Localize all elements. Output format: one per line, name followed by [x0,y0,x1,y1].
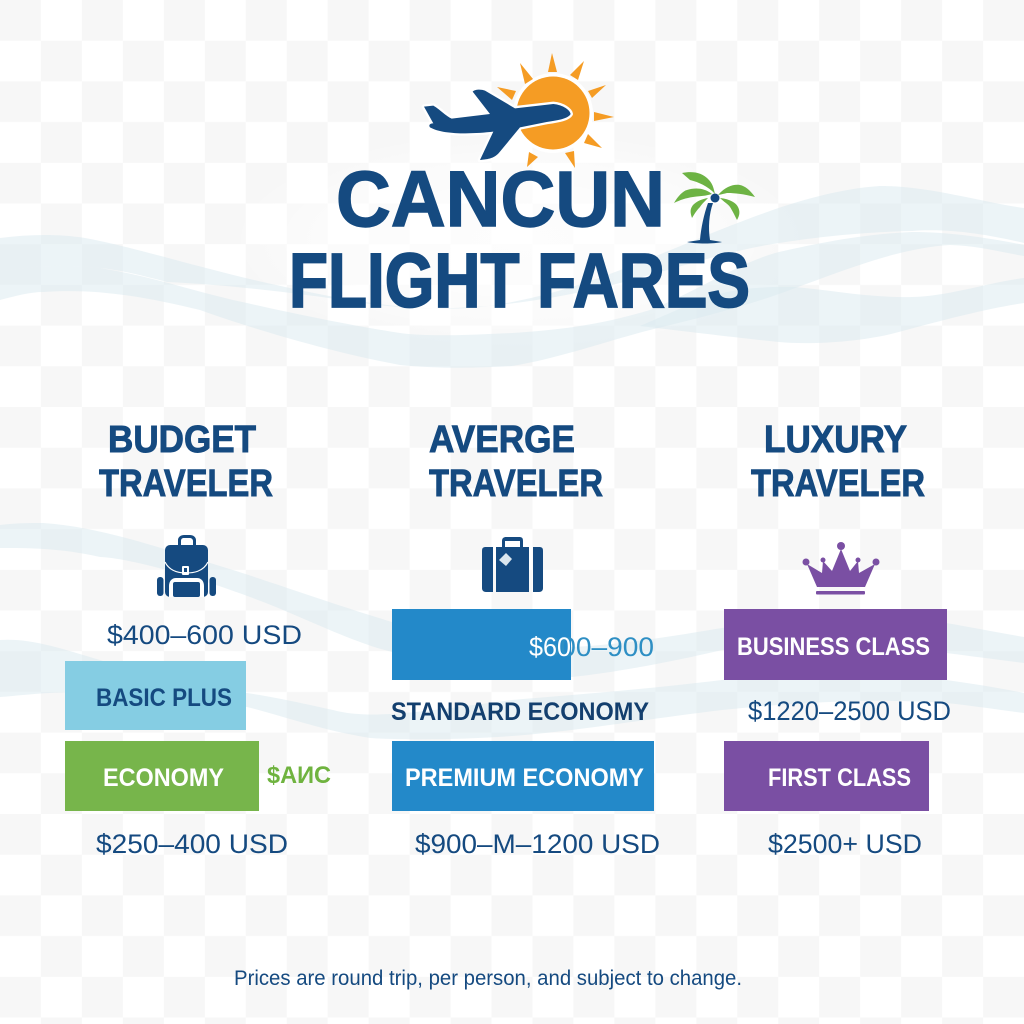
heading: average traveler: TRAVELER [429,463,603,505]
bar: first class: FIRST CLASS [768,764,911,792]
price: premium economy: $900–M–1200 USD [415,829,660,859]
bar: economy: ECONOMY [103,764,224,792]
icon: suitcase [482,537,543,592]
icon: sun behind airplane [497,53,614,168]
bar: business class: BUSINESS CLASS [737,633,930,661]
bar: basic plus: BASIC PLUS [96,684,232,712]
bar: economy [65,741,259,811]
icon: backpack [157,535,216,597]
label: standard economy: STANDARD ECONOMY [391,698,649,726]
bar: standard economy price: $600–900 [529,632,654,662]
bar: standard economy price [392,609,654,680]
label: garbled price: $AИC [267,762,331,789]
price: economy: $250–400 USD [96,829,288,859]
bar: standard economy price: $60 [529,632,571,662]
heading: budget traveler: TRAVELER [99,463,273,505]
heading: average traveler [429,419,603,505]
heading: budget traveler: BUDGET [108,419,256,461]
bar: first class [724,741,929,811]
price: budget: $400–600 USD [107,620,302,650]
bar: business class [724,609,947,680]
price: business class: $1220–2500 USD [748,696,951,726]
heading: luxury traveler: TRAVELER [751,463,925,505]
price: first class: $2500+ USD [768,829,922,859]
heading: luxury traveler: LUXURY [764,419,907,461]
heading: average traveler: AVERGE [429,419,575,461]
title [289,154,750,324]
bar: basic plus [65,661,246,730]
bar: premium economy [392,741,654,811]
icon: crown [802,542,880,594]
icon: palm tree [674,172,755,244]
title: CANCUN [336,154,665,243]
icon: airplane [424,90,571,160]
footnote: Prices are round trip, per person, and subject to change. [234,967,742,990]
heading: luxury traveler [751,419,925,505]
title: FLIGHT FARES [289,238,750,324]
bar: premium economy: PREMIUM ECONOMY [405,764,644,792]
heading: budget traveler [99,419,273,505]
